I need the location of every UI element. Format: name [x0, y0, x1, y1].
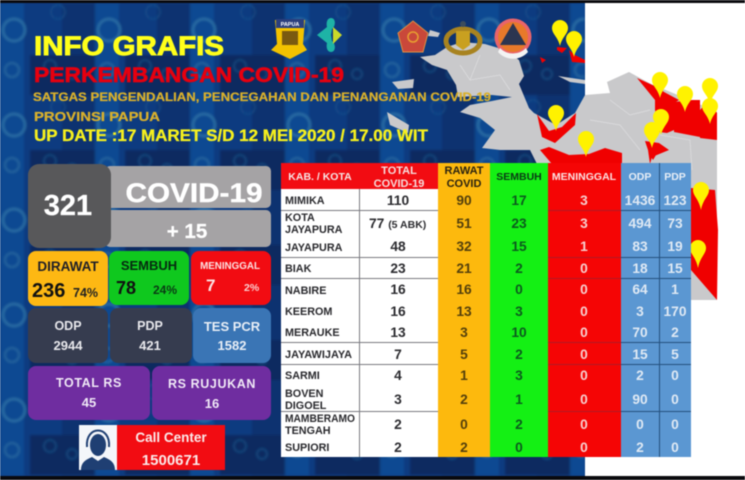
- sembuh: 24%: [153, 283, 177, 297]
- total RS: 45: [82, 395, 96, 410]
- icon: Papua shield: PAPUA: [281, 22, 299, 28]
- row: Keerom: 3: [515, 304, 523, 319]
- row: Merauke: 13: [390, 325, 406, 340]
- COVID-19 header: [105, 166, 271, 208]
- row: Merauke: 2: [671, 325, 679, 340]
- row: Boven Digoel: 2: [460, 392, 468, 407]
- row: Mamberamo Tengah: MAMBERAMO: [285, 413, 355, 425]
- dirawat: [28, 251, 108, 306]
- ODP: 2944: [54, 338, 83, 353]
- row: Boven Digoel: 0: [671, 392, 679, 407]
- TES PCR: [193, 308, 271, 363]
- row: Keerom: KEEROM: [285, 306, 332, 318]
- daily increase: + 15: [167, 220, 207, 243]
- row: Biak: 2: [515, 261, 523, 276]
- row: Jayapura: 15: [511, 239, 527, 254]
- row: Jayapura: 19: [667, 239, 683, 254]
- sembuh: [109, 251, 189, 305]
- row: Sarmi: SARMI: [285, 370, 320, 382]
- row: Boven Digoel: 3: [394, 392, 402, 407]
- total RS: [28, 366, 150, 420]
- row: Boven Digoel: 90: [632, 392, 648, 407]
- TES PCR: 1582: [218, 338, 246, 353]
- row: Biak: 23: [390, 261, 406, 276]
- row: Jayapura: 1: [580, 239, 588, 254]
- row: Mimika: 1436: [625, 193, 656, 208]
- table header: PDP: [664, 171, 686, 183]
- row: Supiori: 0: [580, 440, 588, 455]
- row: Keerom: [285, 304, 687, 319]
- row: Biak: BIAK: [285, 263, 312, 275]
- row: Boven Digoel: [285, 388, 679, 412]
- row: Biak: 15: [667, 261, 683, 276]
- table header: TOTAL: [381, 165, 417, 177]
- row: Kota Jayapura: 73: [667, 216, 683, 231]
- map: red regions: [537, 47, 718, 300]
- row: Kota Jayapura: 23: [511, 216, 527, 231]
- row: Mimika: 17: [511, 193, 527, 208]
- total cases: 321: [44, 190, 92, 222]
- row: Merauke: 70: [632, 325, 648, 340]
- row: Mimika: 90: [456, 193, 472, 208]
- subtitle: PERKEMBANGAN COVID-19: PERKEMBANGAN COVID-19: [34, 64, 344, 87]
- row: Keerom: 16: [390, 304, 406, 319]
- row: Mamberamo Tengah: 0: [580, 417, 588, 432]
- title: INFO GRAFIS: INFO GRAFIS: [34, 31, 224, 61]
- data table: [281, 163, 691, 457]
- row: Supiori: 2: [394, 440, 402, 455]
- icon: Polri emblem: [446, 21, 480, 53]
- row: Supiori: [285, 440, 679, 455]
- row: Merauke: 3: [460, 325, 468, 340]
- update date: UP DATE :17 MARET S/D 12 MEI 2020 / 17.00 WIT: [34, 127, 428, 145]
- row: Jayapura: 32: [456, 239, 472, 254]
- total cases: [28, 164, 111, 248]
- row: Merauke: 10: [511, 325, 527, 340]
- row: Nabire: 64: [632, 282, 648, 297]
- row: Jayawijaya: 5: [671, 347, 679, 362]
- row: Kota Jayapura: 3: [580, 216, 588, 231]
- table header: RAWAT: [445, 165, 484, 177]
- table header: COVID: [447, 178, 481, 190]
- row: Supiori: 2: [460, 440, 468, 455]
- row: Kota Jayapura: 51: [456, 216, 472, 231]
- row: Jayawijaya: 2: [515, 347, 523, 362]
- call center: 1500671: [142, 452, 200, 469]
- row: Boven Digoel: 0: [580, 392, 588, 407]
- row: Jayapura: 48: [390, 239, 406, 254]
- meninggal: MENINGGAL: [200, 261, 260, 272]
- logos: [271, 18, 532, 59]
- icon: BNPB emblem: [494, 18, 532, 59]
- dirawat: 236: [32, 280, 65, 302]
- row: Mimika: 3: [580, 193, 588, 208]
- table header: [288, 165, 686, 190]
- row: Sarmi: [285, 368, 679, 383]
- map of Papua: [387, 20, 718, 300]
- row: Jayapura: 83: [632, 239, 648, 254]
- table header: SEMBUH: [496, 171, 542, 183]
- table header: KAB. / KOTA: [288, 171, 352, 183]
- row: Mimika: MIMIKA: [285, 195, 325, 207]
- row: Kota Jayapura: JAYAPURA: [285, 224, 343, 236]
- total RS: TOTAL RS: [56, 376, 122, 390]
- subtitle: task force: SATGAS PENGENDALIAN, PENCEGAHAN DAN PENANGANAN COVID-19: [33, 90, 491, 104]
- row: Mamberamo Tengah: TENGAH: [285, 425, 331, 437]
- subtitle: province: PROVINSI PAPUA: [34, 110, 160, 124]
- row: Mamberamo Tengah: 2: [394, 417, 402, 432]
- COVID-19 header: COVID-19: [126, 178, 262, 208]
- dirawat: DIRAWAT: [37, 259, 99, 274]
- row: Keerom: 170: [663, 304, 687, 319]
- row: Merauke: [285, 325, 679, 340]
- column backgrounds: [281, 163, 691, 457]
- row: Jayawijaya: 15: [632, 347, 648, 362]
- row: Sarmi: 1: [460, 368, 468, 383]
- row: Mamberamo Tengah: 2: [515, 417, 523, 432]
- row: Sarmi: 3: [515, 368, 523, 383]
- row: Jayawijaya: [285, 347, 679, 362]
- panel: summary figures: [28, 164, 271, 470]
- title block: [33, 31, 491, 145]
- TES PCR: TES PCR: [204, 319, 261, 334]
- row: Mimika: 123: [663, 193, 687, 208]
- row: Boven Digoel: 1: [515, 392, 523, 407]
- PDP: [110, 308, 192, 363]
- row: Nabire: 0: [580, 282, 588, 297]
- row: Supiori: 2: [636, 440, 644, 455]
- icon: Papua shield: [271, 19, 307, 59]
- icon: TNI emblem: [398, 21, 428, 52]
- PDP: 421: [139, 338, 161, 353]
- row: Boven Digoel: DIGOEL: [285, 400, 327, 412]
- row: Sarmi: 0: [580, 368, 588, 383]
- table header: MENINGGAL: [552, 171, 617, 183]
- row: Jayawijaya: 5: [460, 347, 468, 362]
- row: Kota Jayapura: 494: [628, 216, 652, 231]
- row: Nabire: [285, 282, 679, 297]
- row: Biak: 0: [580, 261, 588, 276]
- map: yellow location pins: [548, 20, 718, 268]
- row: Boven Digoel: BOVEN: [285, 388, 324, 400]
- row: Sarmi: 4: [394, 368, 402, 383]
- map: regency borders: [460, 55, 692, 170]
- meninggal: 7: [206, 276, 215, 295]
- row: Mimika: [285, 193, 687, 208]
- sembuh: SEMBUH: [121, 258, 177, 273]
- row: Sarmi: 0: [671, 368, 679, 383]
- row: Sarmi: 2: [636, 368, 644, 383]
- RS rujukan: [152, 366, 271, 420]
- table header: COVID-19: [374, 178, 424, 190]
- row: Supiori: SUPIORI: [285, 442, 329, 454]
- call center: [79, 425, 225, 470]
- ODP: ODP: [54, 319, 82, 333]
- icon: headset agent: [81, 430, 115, 470]
- row: Jayawijaya: 0: [580, 347, 588, 362]
- row: Nabire: 16: [456, 282, 472, 297]
- call center: Call Center: [135, 430, 207, 445]
- row: Kota Jayapura: 77 (5 ABK): [369, 216, 426, 231]
- row: Keerom: 3: [636, 304, 644, 319]
- row: Merauke: 0: [580, 325, 588, 340]
- icon: health ministry logo: [317, 18, 342, 52]
- row: Nabire: 16: [390, 282, 406, 297]
- row: Jayawijaya: JAYAWIJAYA: [285, 349, 352, 361]
- row: Supiori: 0: [671, 440, 679, 455]
- table grid: [281, 189, 438, 457]
- table header: ODP: [629, 171, 651, 183]
- dirawat: 74%: [73, 286, 98, 300]
- row: Mamberamo Tengah: 0: [460, 417, 468, 432]
- row: Mimika: 110: [387, 193, 409, 208]
- row: Keerom: 13: [456, 304, 472, 319]
- row: Mamberamo Tengah: 0: [636, 417, 644, 432]
- row: Biak: 21: [456, 261, 472, 276]
- PDP: PDP: [137, 319, 163, 333]
- RS rujukan: 16: [205, 396, 219, 411]
- row: Keerom: 0: [580, 304, 588, 319]
- meninggal: 2%: [244, 282, 260, 294]
- map: grey landmass: [420, 42, 717, 300]
- map: grey islands: [387, 30, 585, 133]
- meninggal: [191, 251, 271, 305]
- row: Jayapura: JAYAPURA: [285, 242, 343, 254]
- row: Kota Jayapura: [285, 212, 683, 236]
- daily increase: [105, 210, 271, 247]
- row: Kota Jayapura: KOTA: [285, 212, 315, 224]
- row: Mamberamo Tengah: [285, 413, 679, 437]
- row: Jayawijaya: 7: [394, 347, 402, 362]
- row: Merauke: MERAUKE: [285, 327, 340, 339]
- row: Mamberamo Tengah: 0: [671, 417, 679, 432]
- RS rujukan: RS RUJUKAN: [168, 377, 256, 391]
- row: Jayapura: [285, 239, 683, 254]
- sembuh: 78: [116, 278, 136, 298]
- ODP: [28, 308, 108, 363]
- row: Biak: [285, 261, 683, 276]
- row: Biak: 18: [632, 261, 648, 276]
- row: Supiori: 0: [515, 440, 523, 455]
- row: Nabire: 1: [671, 282, 679, 297]
- row: Nabire: 0: [515, 282, 523, 297]
- row: Nabire: NABIRE: [285, 285, 326, 297]
